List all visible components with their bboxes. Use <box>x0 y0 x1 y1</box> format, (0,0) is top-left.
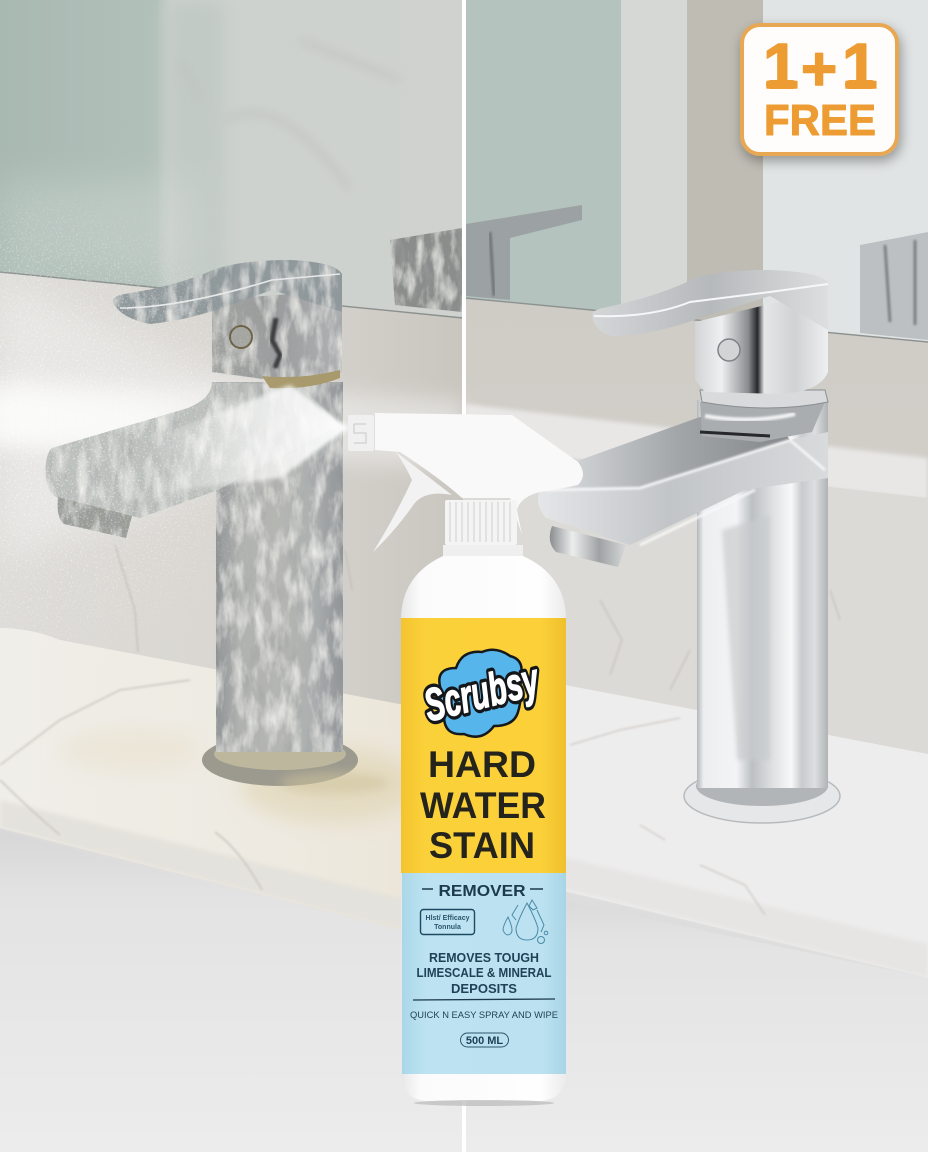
badge text: FREE: FREE <box>764 96 876 145</box>
product claim <box>416 950 552 996</box>
wordmark fill: Scrubsy <box>419 652 545 731</box>
centre divider line top <box>462 0 466 416</box>
cloud <box>439 650 522 737</box>
right wall below mirror <box>465 298 928 780</box>
spout top surface <box>540 400 790 490</box>
trigger lever <box>373 452 452 552</box>
heading: Hard Water Stain: STAIN <box>429 825 535 866</box>
badge text: 1+1: 1 <box>842 30 878 102</box>
left mirror (before side) <box>0 0 463 320</box>
spray haze behind faucet <box>0 280 350 560</box>
brand logo: Scrubsy <box>419 650 545 737</box>
badge: high efficacy formula <box>420 910 474 934</box>
collar <box>700 390 828 408</box>
heading: Hard Water Stain: HARD <box>428 744 536 785</box>
handle <box>113 260 342 324</box>
yellow label <box>401 618 566 873</box>
left basin <box>0 826 465 1152</box>
centre divider line bottom <box>462 1100 466 1152</box>
spout front face <box>538 432 828 545</box>
body <box>216 382 343 752</box>
mirror reflection: clean faucet at right edge <box>860 232 928 340</box>
mirror edge line right <box>465 298 928 342</box>
subheading: Remover: REMOVER <box>438 883 526 900</box>
badge: high efficacy formula: Tonnula <box>434 924 461 931</box>
base <box>202 734 390 794</box>
badge: 1+1 free offer <box>742 25 897 154</box>
right countertop <box>560 684 928 978</box>
mirror reflection: clean faucet left side of divider <box>466 205 582 300</box>
right backsplash ledge <box>465 404 928 500</box>
product claim: DEPOSITS <box>451 981 517 996</box>
right faucet: clean chrome <box>538 270 840 823</box>
mirror reflection: dirty faucet <box>390 228 462 312</box>
spout highlight <box>545 440 825 545</box>
head <box>212 290 342 380</box>
right wall lower <box>465 446 928 780</box>
left wall below mirror <box>0 272 463 760</box>
corrosion mark <box>272 318 280 368</box>
badge text: 1+1: 1 <box>763 30 799 102</box>
nozzle <box>348 415 374 451</box>
bottle shadow on basin <box>414 1100 554 1106</box>
claim divider <box>413 999 555 1000</box>
head <box>695 290 828 394</box>
spout <box>46 382 340 518</box>
wordmark outline: Scrubsy <box>419 652 545 731</box>
ribbed cap <box>443 500 523 557</box>
base <box>684 766 840 823</box>
mirror edge line left <box>0 272 463 318</box>
icon: water droplets <box>503 900 548 944</box>
bottle body <box>401 556 566 1101</box>
trigger sprayer <box>348 413 583 557</box>
screw <box>718 339 740 361</box>
heading: Hard Water Stain: WATER <box>420 785 546 826</box>
left wall marble veins <box>115 545 352 652</box>
spout collar <box>700 402 825 442</box>
heading: Hard Water Stain <box>420 744 546 866</box>
aerator <box>550 526 626 567</box>
aerator <box>58 497 132 538</box>
handle <box>592 270 828 336</box>
subheading: Remover <box>422 883 543 900</box>
right mirror (after side) <box>465 0 928 345</box>
handle edge <box>594 284 828 316</box>
product: spray bottle <box>348 413 583 1106</box>
right basin <box>465 880 928 1152</box>
left wall ledge glow <box>0 375 463 470</box>
left countertop <box>0 628 420 932</box>
product claim: LIMESCALE & MINERAL <box>416 965 552 980</box>
spray cone <box>150 385 349 490</box>
body reflections <box>722 515 770 760</box>
left faucet: corroded <box>46 260 390 794</box>
badge: high efficacy formula: Hlst/ Efficacy <box>426 915 470 922</box>
blue label <box>402 873 566 1074</box>
spray mist <box>0 198 348 637</box>
badge text: 1+1: + <box>801 35 837 104</box>
badge card <box>742 25 897 154</box>
volume pill <box>460 1033 508 1047</box>
badge text: 1+1 <box>763 30 878 104</box>
screw <box>230 326 252 348</box>
usage line: QUICK N EASY SPRAY AND WIPE <box>410 1010 558 1021</box>
fine droplets <box>0 198 275 637</box>
sprayer head <box>375 413 583 535</box>
volume pill: 500 ML <box>466 1035 503 1047</box>
product claim: REMOVES TOUGH <box>429 950 539 965</box>
handle highlight <box>120 274 340 308</box>
rust ring <box>262 370 340 388</box>
body <box>697 400 828 788</box>
